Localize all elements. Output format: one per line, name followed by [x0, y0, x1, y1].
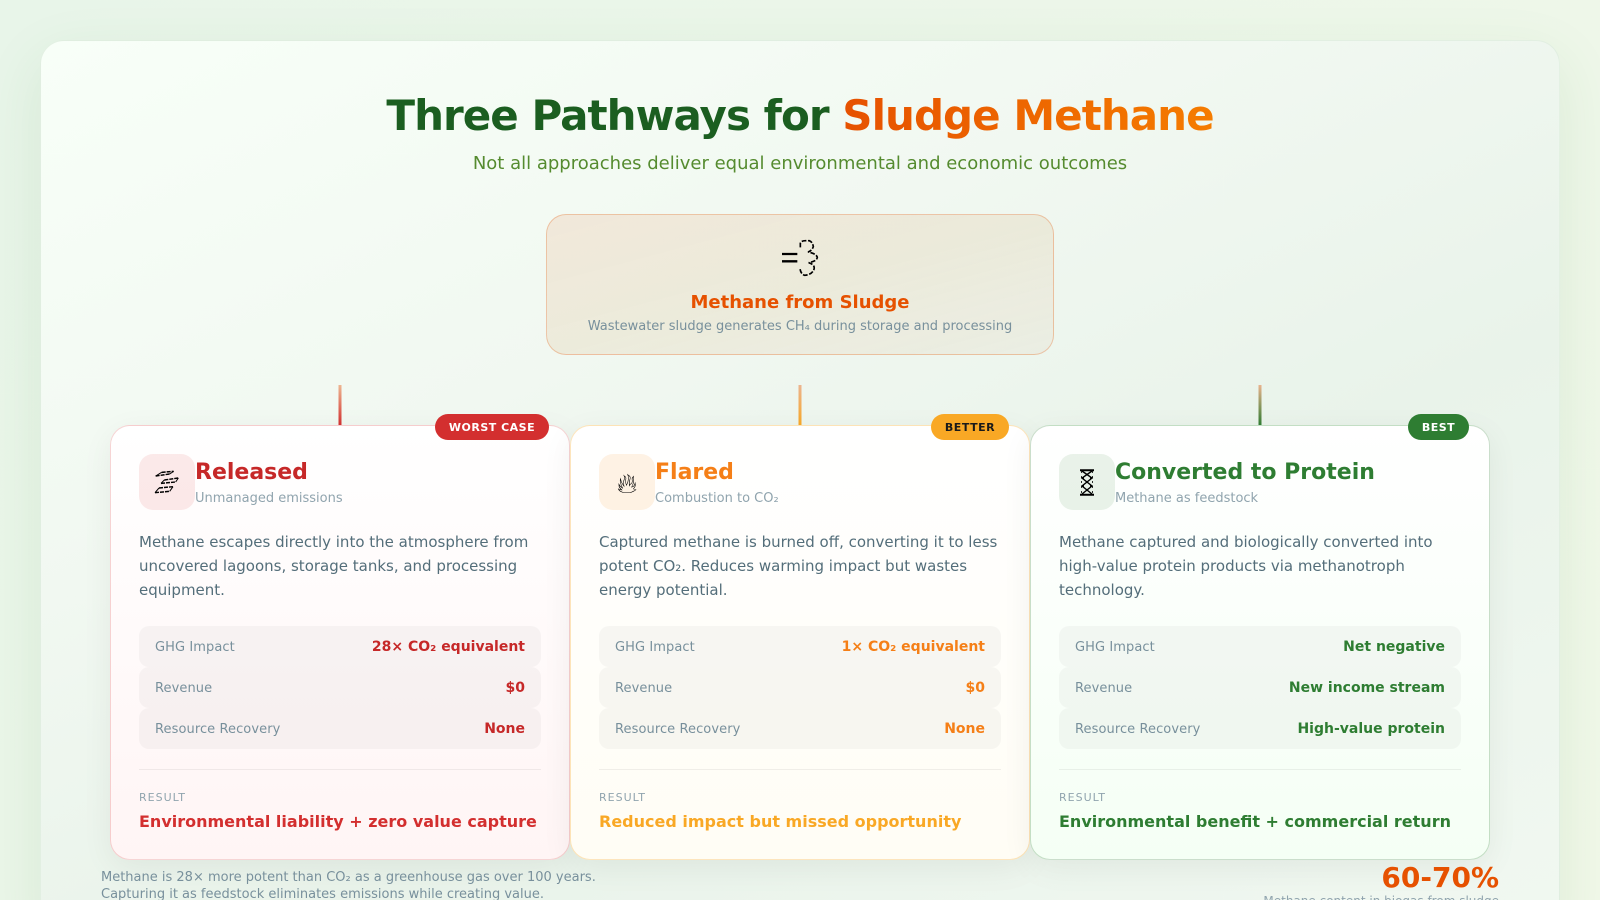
flared description: Captured methane is burned off, converting it to less: [599, 533, 997, 551]
released description: Methane escapes directly into the atmosphere from: [139, 533, 528, 551]
badge: worst case: WORST CASE: [449, 421, 535, 434]
metric: GHG impact: GHG Impact: [1075, 640, 1155, 655]
connector: hub to protein: [1258, 385, 1262, 426]
title: Three Pathways for Sludge Methane: [386, 91, 1214, 140]
result label: RESULT: [139, 791, 186, 804]
metric: resource recovery: None: [484, 721, 525, 737]
released description: uncovered lagoons, storage tanks, and processing: [139, 557, 517, 575]
flared description: [599, 533, 997, 599]
metric: GHG impact: [599, 626, 1001, 667]
metric: revenue: $0: [506, 680, 525, 696]
result label: RESULT: [1059, 791, 1106, 804]
panel: released pathway: [110, 425, 570, 860]
metric: resource recovery: [1059, 708, 1461, 749]
protein description: [1059, 533, 1433, 599]
metric: revenue: $0: [966, 680, 985, 696]
flared heading: Flared: [655, 460, 734, 485]
result label: RESULT: [599, 791, 646, 804]
icon: fog: [139, 454, 195, 510]
released description: [139, 533, 528, 599]
icon: flame: [599, 454, 655, 510]
connector: hub to released: [338, 385, 342, 426]
metric: revenue: [1059, 667, 1461, 708]
flared description: energy potential.: [599, 581, 728, 599]
metric: revenue: Revenue: [155, 681, 212, 696]
released description: equipment.: [139, 581, 225, 599]
metric: GHG impact: 28× CO₂ equivalent: [372, 639, 525, 655]
metric: GHG impact: [139, 626, 541, 667]
metric: GHG impact: GHG Impact: [155, 640, 235, 655]
icon: flame: 🔥︎: [617, 462, 637, 502]
metric: revenue: Revenue: [1075, 681, 1132, 696]
protein subheading: Methane as feedstock: [1115, 491, 1258, 506]
metric: resource recovery: High-value protein: [1297, 721, 1445, 737]
badge: best: BEST: [1422, 421, 1455, 434]
protein description: technology.: [1059, 581, 1145, 599]
protein description: high-value protein products via methanotroph: [1059, 557, 1405, 575]
icon: DNA: [1059, 454, 1115, 510]
metric: GHG impact: [1059, 626, 1461, 667]
metric: GHG impact: Net negative: [1343, 639, 1445, 655]
protein heading: Converted to Protein: [1115, 460, 1375, 485]
metric: GHG impact: 1× CO₂ equivalent: [842, 639, 985, 655]
connector: hub to flared: [798, 385, 802, 426]
footer note: Methane is 28× more potent than CO₂ as a greenhouse gas over 100 years.: [101, 870, 596, 885]
panel: converted to protein pathway: [1030, 425, 1490, 860]
metric: revenue: Revenue: [615, 681, 672, 696]
metric: revenue: New income stream: [1289, 680, 1445, 696]
badge: better: BETTER: [945, 421, 995, 434]
flared subheading: Combustion to CO₂: [655, 491, 779, 506]
badge: better: [931, 414, 1009, 440]
metric: resource recovery: [139, 708, 541, 749]
metric: GHG impact: GHG Impact: [615, 640, 695, 655]
panel: flared pathway: [570, 425, 1030, 860]
flared description: potent CO₂. Reduces warming impact but wastes: [599, 557, 967, 575]
released subheading: Unmanaged emissions: [195, 491, 343, 506]
hub heading: Methane from Sludge: [690, 292, 910, 313]
metric: resource recovery: None: [944, 721, 985, 737]
statistic value: 60-70%: [1381, 861, 1499, 894]
result text: Reduced impact but missed opportunity: [599, 812, 961, 831]
result text: Environmental liability + zero value capture: [139, 812, 537, 831]
released heading: Released: [195, 460, 308, 485]
result text: Environmental benefit + commercial return: [1059, 812, 1451, 831]
metric: revenue: [139, 667, 541, 708]
footer statistic: [1263, 861, 1499, 900]
protein description: Methane captured and biologically converted into: [1059, 533, 1433, 551]
metric: resource recovery: Resource Recovery: [1075, 722, 1200, 737]
metric: resource recovery: Resource Recovery: [615, 722, 740, 737]
panel: methane source hub: [546, 214, 1054, 355]
subtitle: Not all approaches deliver equal environmental and economic outcomes: [473, 153, 1127, 174]
metric: resource recovery: [599, 708, 1001, 749]
badge: worst case: [435, 414, 549, 440]
icon: dash of gas: [782, 240, 818, 276]
metric: revenue: [599, 667, 1001, 708]
metric: resource recovery: Resource Recovery: [155, 722, 280, 737]
badge: best: [1408, 414, 1469, 440]
footer note: [101, 870, 596, 900]
hub description: Wastewater sludge generates CH₄ during storage and processing: [588, 319, 1012, 334]
